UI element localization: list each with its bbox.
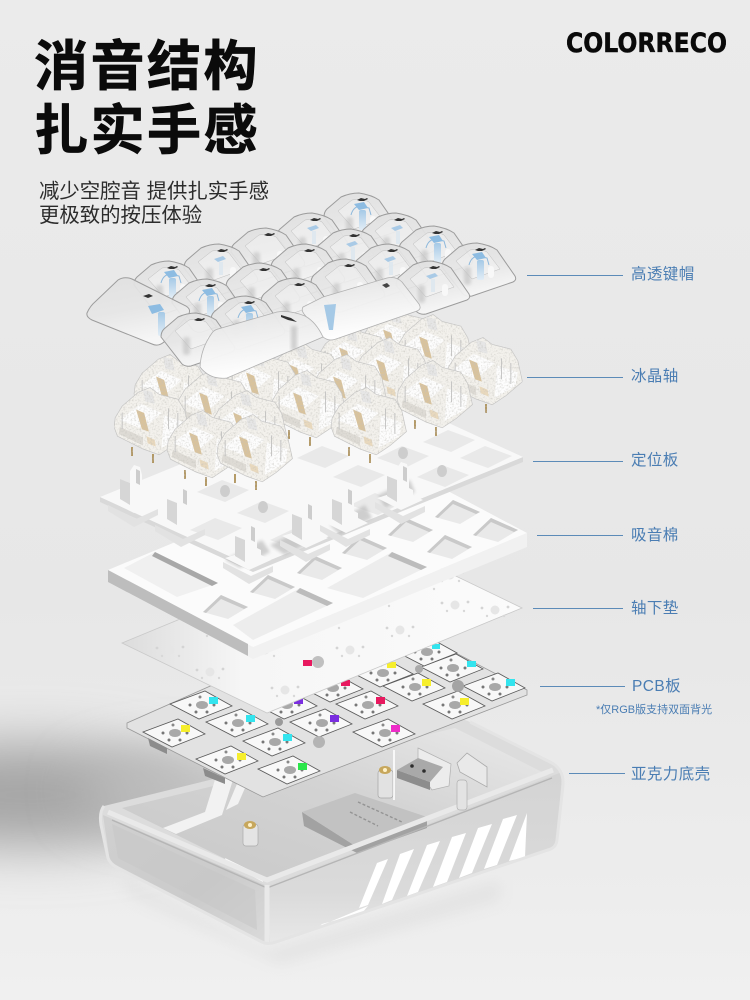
support posts [108,462,425,584]
sound foam layer [108,456,527,659]
transparent keycaps [87,193,516,378]
wide keycap right [302,278,420,340]
wide keycap front [200,312,323,378]
label: plate: 定位板 [631,452,679,469]
label: switches: 冰晶轴 [631,368,679,385]
small pillar [457,780,467,810]
label: pad: 轴下垫 [631,600,679,617]
clip piece [457,753,487,787]
battery block [302,793,427,853]
white stripes [320,813,527,926]
label: PCB: PCB板 [632,678,681,695]
magenta led through pad [303,660,312,666]
wide keycap left [87,278,190,345]
brand logo: COLORRECO [566,28,727,59]
RGB leds [181,644,515,770]
stabiliser holes [220,447,447,513]
pad screw hole [312,656,324,668]
leader: pad [533,608,623,609]
usb receiver [397,748,451,790]
left wall [103,815,267,943]
subtitle [39,180,269,226]
label: case: 亚克力底壳 [631,766,711,783]
floor slot [225,858,263,882]
case floor [122,728,548,880]
title: 消音结构 [34,37,260,97]
plate soft shadows [225,480,415,568]
leader: case [569,773,625,774]
label: foam: 吸音棉 [631,527,679,544]
title [34,37,260,161]
acrylic base case [100,719,563,944]
label: keycaps: 高透键帽 [631,266,695,283]
switch pad layer [122,538,522,713]
subtitle: 更极致的按压体验 [39,204,202,226]
ice crystal switches [114,308,522,490]
leader: plate [533,461,623,462]
leader: switches [527,377,623,378]
footnote: RGB: *仅RGB版支持双面背光 [596,704,712,716]
title: 扎实手感 [34,101,260,161]
leader: keycaps [527,275,623,276]
leader: PCB [540,686,625,687]
back wall stripes [163,770,236,834]
leader: foam [537,535,623,536]
right wall [267,772,562,943]
positioning plate [100,387,523,584]
subtitle: 减少空腔音 提供扎实手感 [39,181,269,203]
ground shadow [0,743,500,965]
PCB board [127,612,527,797]
standoff post left [243,821,258,846]
standoff post centre [378,750,394,800]
case rim [108,770,553,880]
